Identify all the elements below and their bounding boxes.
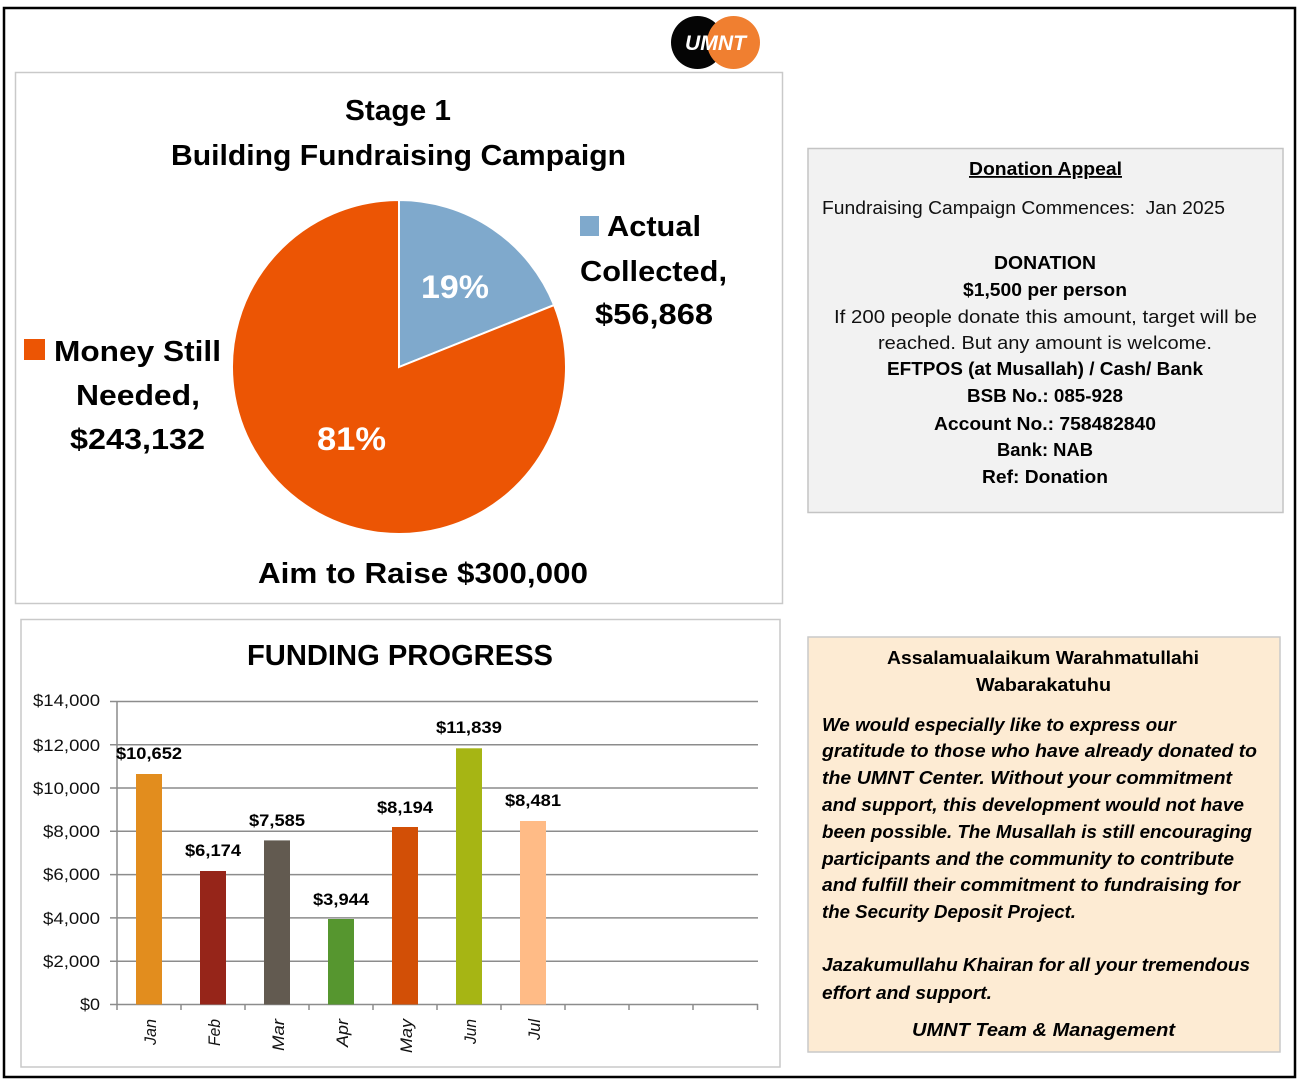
- heading: funding progress: FUNDING PROGRESS: [247, 640, 553, 672]
- greeting: Assalamualaikum Warahmatullahi: [887, 648, 1199, 668]
- y axis labels: $0: [80, 995, 100, 1014]
- panel: thank you message: [808, 637, 1280, 1052]
- campaign start date: Fundraising Campaign Commences: Jan 2025: [822, 198, 1225, 218]
- month labels: May: [397, 1017, 416, 1053]
- donation details: EFTPOS (at Musallah) / Cash/ Bank: [887, 359, 1204, 379]
- message body: the Security Deposit Project.: [822, 902, 1076, 922]
- legend: money still needed: Money Still: [54, 336, 221, 368]
- panel: donation appeal: [808, 148, 1283, 512]
- heading: donation appeal: Donation Appeal: [969, 159, 1122, 179]
- bars: [136, 748, 546, 1004]
- panel: funding progress bar chart: [21, 620, 780, 1067]
- heading: Stage 1: Stage 1: [345, 95, 451, 127]
- message body: gratitude to those who have already donated to: [821, 741, 1257, 761]
- bar value labels: $10,652: [116, 744, 182, 763]
- greeting: Wabarakatuhu: [976, 675, 1111, 695]
- y axis labels: $2,000: [43, 952, 100, 971]
- panel: stage 1 fundraising pie chart: [16, 72, 782, 604]
- y axis labels: $4,000: [43, 909, 100, 928]
- signature: UMNT Team & Management: [912, 1020, 1176, 1040]
- slice label: 19%: 19%: [421, 269, 489, 305]
- pie chart: [232, 200, 566, 534]
- y axis labels: $12,000: [33, 736, 100, 755]
- bar value labels: $8,194: [377, 798, 434, 817]
- message body: We would especially like to express our: [822, 715, 1177, 735]
- donation details: [834, 253, 1257, 487]
- bar value labels: $7,585: [249, 811, 305, 830]
- y axis labels: [33, 691, 100, 1014]
- bar value labels: $11,839: [436, 718, 502, 737]
- month labels: Mar: [269, 1018, 288, 1051]
- legend: money still needed: Needed,: [76, 380, 200, 412]
- bar value labels: [116, 718, 561, 909]
- month labels: Apr: [333, 1018, 352, 1048]
- legend: money still needed: $243,132: [70, 424, 205, 456]
- greeting: [887, 648, 1199, 695]
- bar value labels: $8,481: [505, 791, 561, 810]
- bar value labels: $3,944: [313, 890, 370, 909]
- month labels: [141, 1017, 544, 1053]
- caption: aim to raise: Aim to Raise $300,000: [258, 558, 588, 590]
- legend: actual collected: Actual: [607, 211, 701, 243]
- message body: Jazakumullahu Khairan for all your tremendous: [822, 955, 1250, 975]
- legend: actual collected: $56,868: [595, 299, 713, 331]
- slice label: 81%: 81%: [317, 421, 386, 457]
- donation details: Account No.: 758482840: [934, 414, 1156, 434]
- message body: and fulfill their commitment to fundraising for: [822, 875, 1241, 895]
- y axis labels: $8,000: [43, 822, 100, 841]
- donation details: reached. But any amount is welcome.: [878, 333, 1212, 353]
- message body: and support, this development would not have: [822, 795, 1244, 815]
- message body: effort and support.: [822, 983, 992, 1003]
- message body: the UMNT Center. Without your commitment: [822, 768, 1233, 788]
- month labels: Jan: [141, 1019, 160, 1046]
- gridlines and axes: [110, 701, 758, 1010]
- message body: [821, 715, 1257, 1003]
- logo: UMNT: [671, 16, 760, 69]
- legend: money still needed: [24, 336, 221, 456]
- message body: participants and the community to contribute: [821, 849, 1234, 869]
- donation details: DONATION: [994, 253, 1096, 273]
- legend: actual collected: Collected,: [580, 256, 727, 288]
- logo: UMNT: UMNT: [685, 32, 748, 55]
- donation details: Ref: Donation: [982, 467, 1108, 487]
- heading: Building Fundraising Campaign: Building Fundraising Campaign: [171, 140, 626, 172]
- y axis labels: $10,000: [33, 779, 100, 798]
- message body: been possible. The Musallah is still encouraging: [822, 822, 1252, 842]
- y axis labels: $6,000: [43, 865, 100, 884]
- legend: actual collected: [580, 211, 727, 331]
- donation details: If 200 people donate this amount, target will be: [834, 307, 1257, 327]
- month labels: Jul: [525, 1018, 544, 1041]
- y axis labels: $14,000: [33, 691, 100, 710]
- donation details: BSB No.: 085-928: [967, 386, 1123, 406]
- month labels: Feb: [205, 1019, 224, 1046]
- month labels: Jun: [461, 1019, 480, 1045]
- donation details: Bank: NAB: [997, 440, 1093, 460]
- bar value labels: $6,174: [185, 841, 242, 860]
- donation details: $1,500 per person: [963, 280, 1127, 300]
